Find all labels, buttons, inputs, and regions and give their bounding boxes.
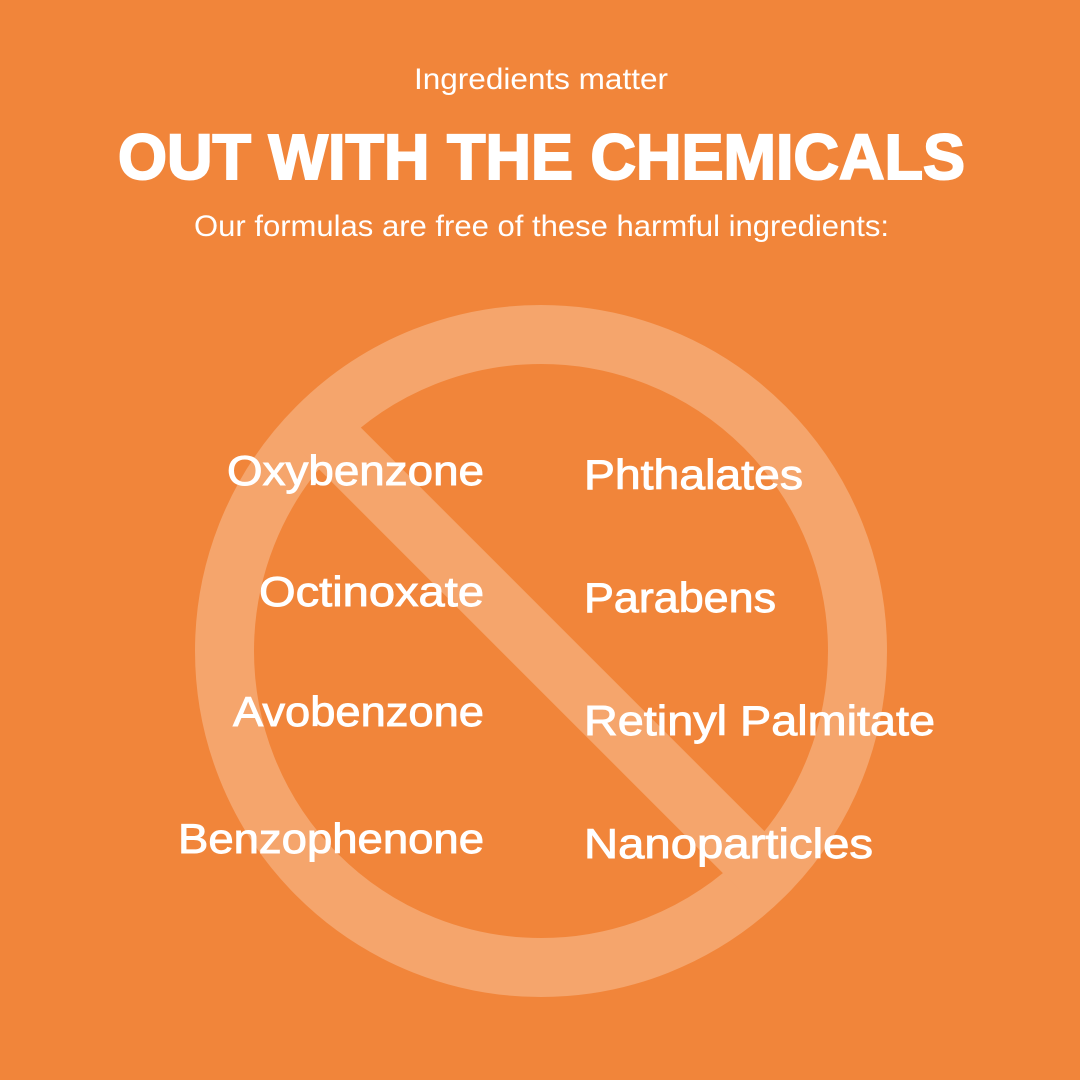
left ingredient list — [178, 447, 484, 862]
ingredient: Phthalates: Phthalates — [584, 451, 803, 498]
ingredient: Avobenzone: Avobenzone — [233, 688, 484, 735]
eyebrow: Ingredients matter: Ingredients matter — [414, 63, 668, 96]
subtitle: Our formulas are free of these harmful ingredients: — [194, 210, 889, 243]
ingredient: Nanoparticles: Nanoparticles — [584, 820, 873, 867]
right ingredient list — [584, 451, 935, 867]
ingredient: Parabens: Parabens — [584, 574, 776, 621]
ingredient: Benzophenone: Benzophenone — [178, 815, 484, 862]
ingredient: Octinoxate: Octinoxate — [259, 568, 484, 615]
title: OUT WITH THE CHEMICALS — [118, 121, 965, 193]
ingredient: Oxybenzone: Oxybenzone — [227, 447, 484, 494]
ingredient: Retinyl Palmitate: Retinyl Palmitate — [584, 697, 935, 744]
icon: prohibition sign — [224, 334, 858, 968]
